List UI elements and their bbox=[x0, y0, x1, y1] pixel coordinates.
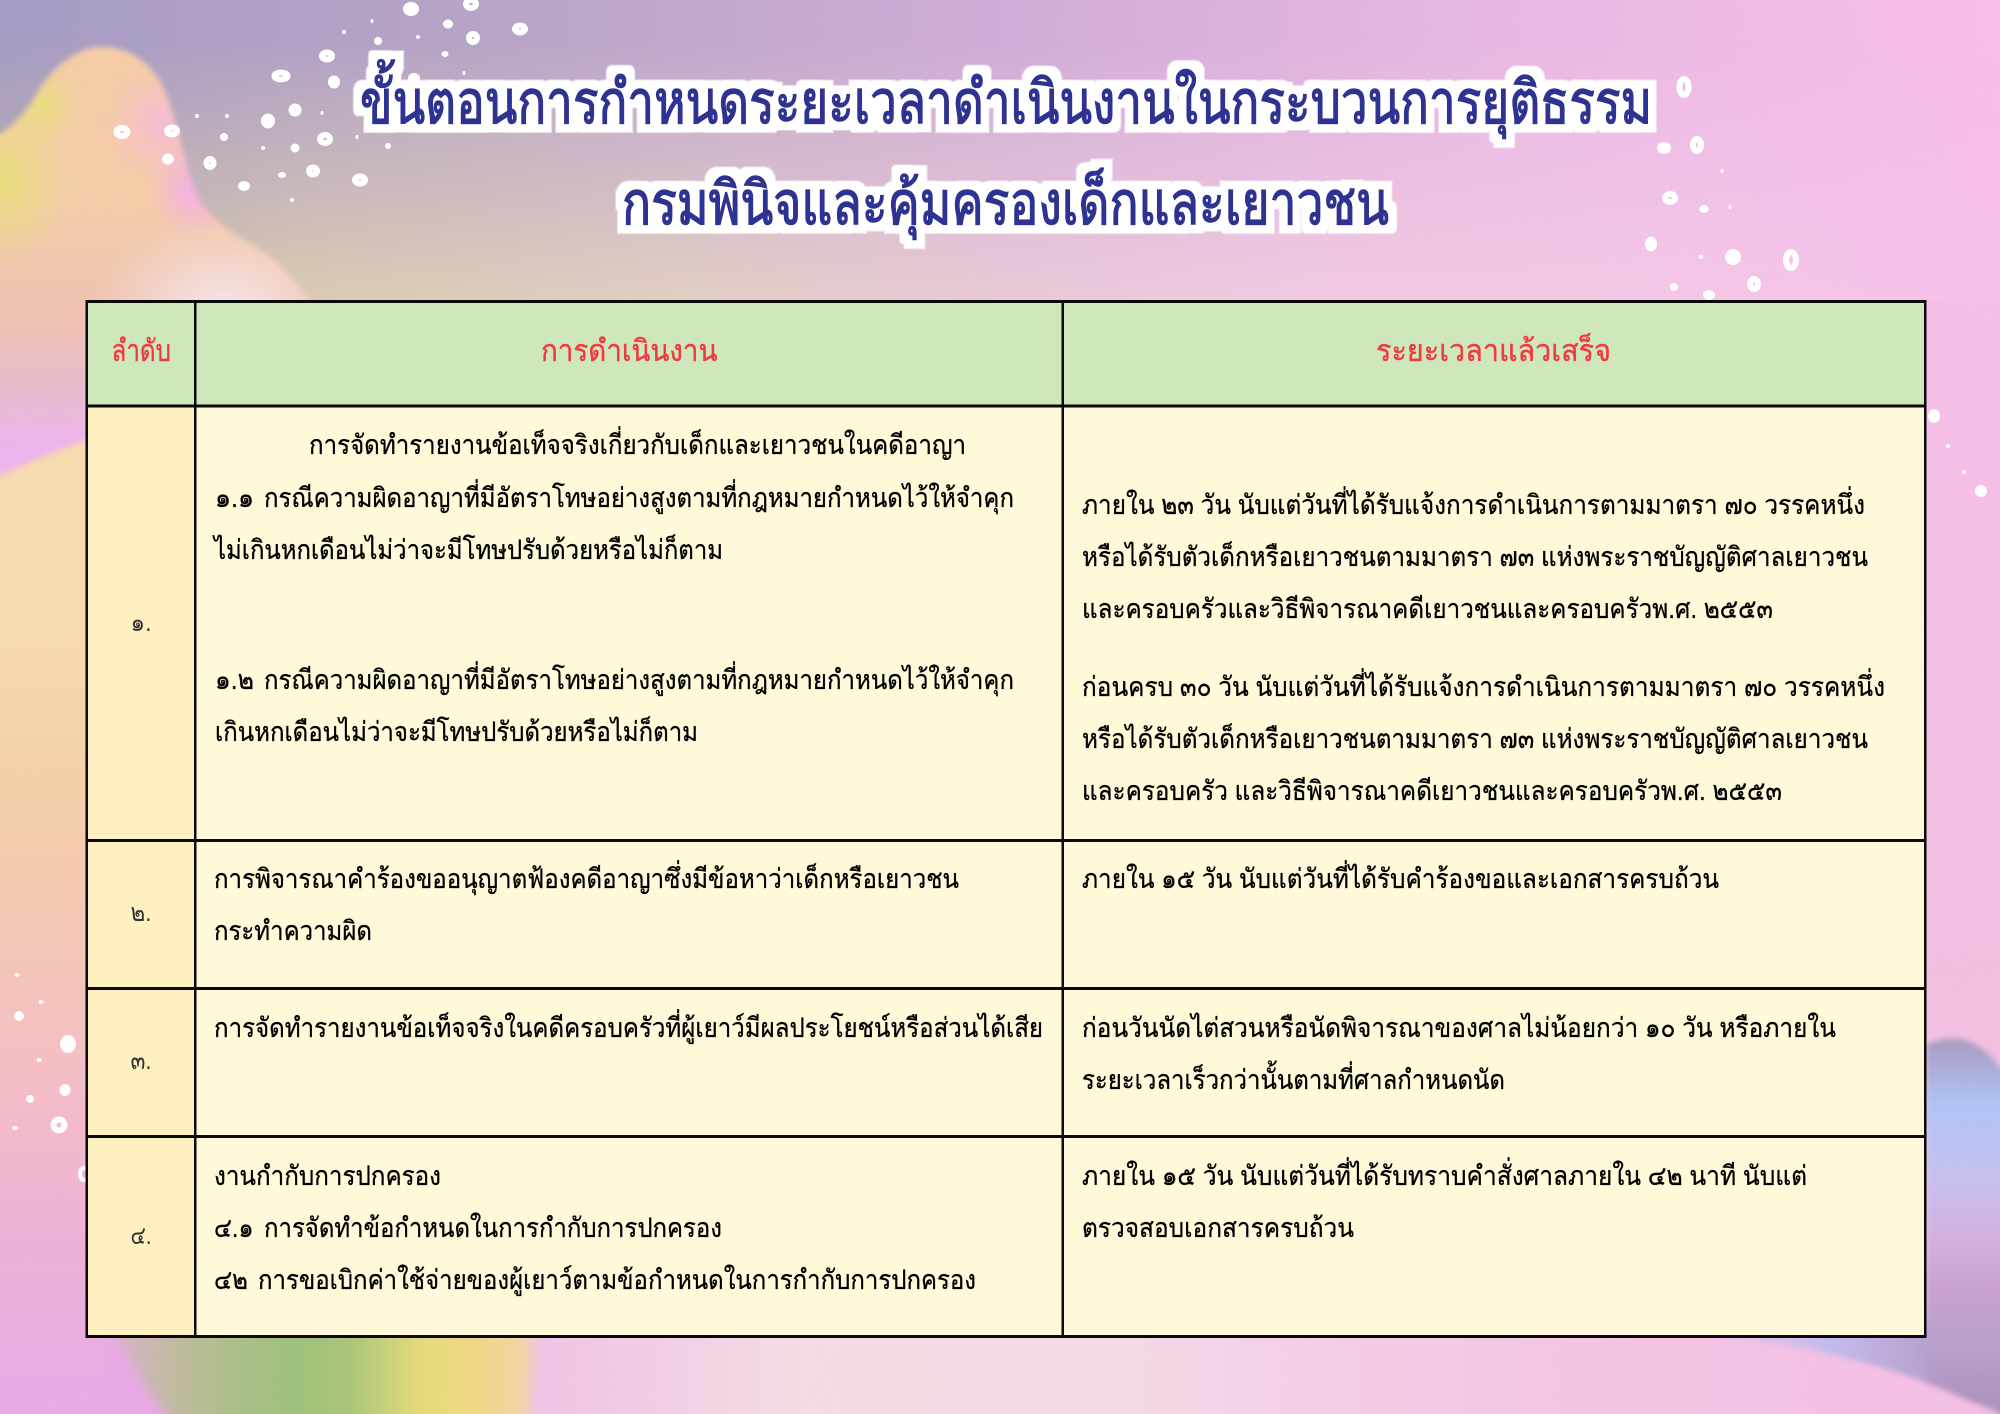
row 4: งานกำกับการปกครอง bbox=[214, 1161, 441, 1191]
row 2: ภายใน ๑๕ วัน นับแต่วันที่ได้รับคำร้องขอและเอกสารครบถ้วน bbox=[1082, 860, 1719, 894]
row 1: ก่อนครบ ๓๐ วัน นับแต่วันที่ได้รับแจ้งการดำเนินการตามมาตรา ๗๐ วรรคหนึ่ง bbox=[1082, 668, 1885, 702]
row 4: ตรวจสอบเอกสารครบถ้วน bbox=[1082, 1213, 1354, 1243]
row 2: การพิจารณาคำร้องขออนุญาตฟ้องคดีอาญาซึ่งมีข้อหาว่าเด็กหรือเยาวชน bbox=[214, 860, 959, 896]
row 4: การขอเบิกค่าใช้จ่ายของผู้เยาว์ตามข้อกำหนดในการกำกับการปกครอง bbox=[258, 1264, 976, 1296]
decorative white speckles, right bbox=[1645, 79, 1987, 497]
table header row: ลำดับ bbox=[112, 335, 171, 368]
title: กรมพินิจและคุ้มครองเด็กและเยาวชน bbox=[622, 168, 1389, 240]
row 2 bbox=[130, 860, 1719, 946]
row 1: การจัดทำรายงานข้อเท็จจริงเกี่ยวกับเด็กและเยาวชนในคดีอาญา bbox=[309, 426, 966, 460]
row 1: และครอบครัว และวิธีพิจารณาคดีเยาวชนและครอบครัวพ.ศ. ๒๕๕๓ bbox=[1082, 776, 1782, 806]
row 1: หรือได้รับตัวเด็กหรือเยาวชนตามมาตรา ๗๓ แห่งพระราชบัญญัติศาลเยาวชน bbox=[1082, 721, 1868, 754]
row 1: ๑.๒ bbox=[215, 665, 254, 695]
row 3 bbox=[130, 1009, 1836, 1095]
decorative white speckles, lower left bbox=[12, 973, 88, 1180]
row 4 bbox=[130, 1157, 1807, 1296]
table header row: การดำเนินงาน bbox=[541, 335, 718, 368]
row 4: ๔๒ bbox=[214, 1265, 248, 1295]
decorative white speckles, top left bbox=[116, 0, 525, 202]
panel: timeline table bbox=[86, 300, 1926, 1338]
blob: top left bbox=[0, 44, 310, 480]
row 3: ระยะเวลาเร็วกว่านั้นตามที่ศาลกำหนดนัด bbox=[1082, 1060, 1505, 1095]
row 1: ภายใน ๒๓ วัน นับแต่วันที่ได้รับแจ้งการดำเนินการตามมาตรา ๗๐ วรรคหนึ่ง bbox=[1082, 486, 1865, 520]
row 4: ๔. bbox=[130, 1222, 152, 1250]
table header row bbox=[86, 301, 1925, 406]
blob: bottom green bbox=[112, 1325, 532, 1414]
row 3: การจัดทำรายงานข้อเท็จจริงในคดีครอบครัวที่ผู้เยาว์มีผลประโยชน์หรือส่วนได้เสีย bbox=[214, 1009, 1043, 1044]
row 1: กรณีความผิดอาญาที่มีอัตราโทษอย่างสูงตามที่กฎหมายกำหนดไว้ให้จำคุก bbox=[264, 479, 1014, 515]
row 3: ๓. bbox=[130, 1047, 152, 1075]
row 1: กรณีความผิดอาญาที่มีอัตราโทษอย่างสูงตามที่กฎหมายกำหนดไว้ให้จำคุก bbox=[264, 661, 1014, 697]
title: ขั้นตอนการกำหนดระยะเวลาดำเนินงานในกระบวนการยุติธรรม bbox=[360, 59, 1652, 139]
title bbox=[360, 59, 1652, 240]
row 4: ภายใน ๑๕ วัน นับแต่วันที่ได้รับทราบคำสั่งศาลภายใน ๔๒ นาที นับแต่ bbox=[1082, 1157, 1807, 1191]
table body background bbox=[86, 406, 1925, 1336]
table header row: ระยะเวลาแล้วเสร็จ bbox=[1376, 332, 1611, 368]
row 4: การจัดทำข้อกำหนดในการกำกับการปกครอง bbox=[264, 1212, 722, 1243]
row 1: ๑. bbox=[130, 609, 152, 637]
row 1: หรือได้รับตัวเด็กหรือเยาวชนตามมาตรา ๗๓ แห่งพระราชบัญญัติศาลเยาวชน bbox=[1082, 539, 1868, 572]
row 1: เกินหกเดือนไม่ว่าจะมีโทษปรับด้วยหรือไม่ก็ตาม bbox=[215, 714, 698, 747]
row 1: ไม่เกินหกเดือนไม่ว่าจะมีโทษปรับด้วยหรือไม่ก็ตาม bbox=[212, 532, 723, 565]
blob: left peach bbox=[0, 438, 110, 1414]
row 2: ๒. bbox=[130, 899, 152, 927]
row 1: และครอบครัวและวิธีพิจารณาคดีเยาวชนและครอบครัวพ.ศ. ๒๕๕๓ bbox=[1082, 594, 1773, 624]
row 4: ๔.๑ bbox=[214, 1213, 254, 1243]
row 1: ๑.๑ bbox=[215, 483, 254, 513]
row 2: กระทำความผิด bbox=[214, 916, 372, 946]
blob: right blue bbox=[1738, 1036, 2000, 1414]
row 3: ก่อนวันนัดไต่สวนหรือนัดพิจารณาของศาลไม่น้อยกว่า ๑๐ วัน หรือภายใน bbox=[1082, 1012, 1836, 1043]
row 1 bbox=[130, 426, 1885, 806]
